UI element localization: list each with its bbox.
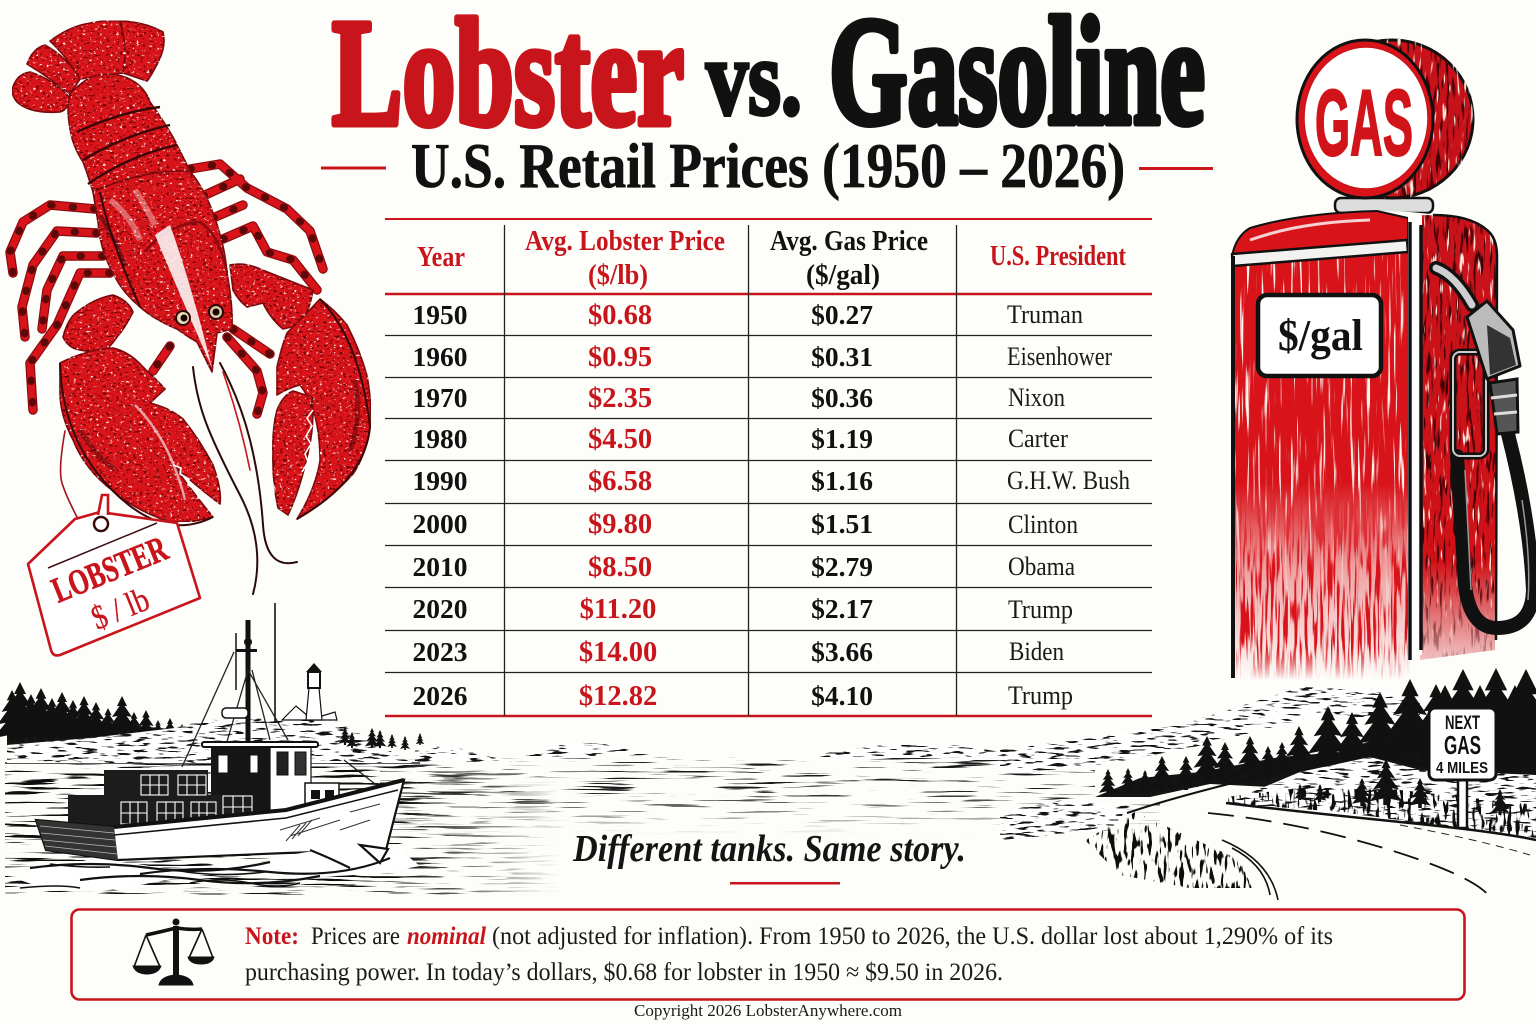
year column: 1950	[412, 299, 468, 330]
title	[332, 0, 1205, 158]
pump price window: $/gal	[1278, 311, 1363, 360]
table header row	[417, 225, 1126, 291]
year column	[412, 299, 468, 711]
lobster price column: $0.95	[588, 342, 652, 373]
year column: 2023	[412, 636, 468, 667]
table header row: ($/lb)	[588, 259, 648, 291]
gas price column: $0.36	[811, 382, 873, 413]
year column: 1960	[412, 341, 468, 372]
gas price column: $4.10	[811, 680, 873, 711]
lobster price column: $11.20	[580, 594, 656, 625]
title: vs.	[706, 19, 802, 138]
road sign: next gas 4 miles	[1429, 708, 1496, 828]
year column: 2026	[412, 680, 468, 711]
note text: (not adjusted for inflation). From 1950 to 2026, the U.S. dollar lost about 1,290% of its	[492, 923, 1333, 950]
lobster shell details	[60, 107, 370, 525]
antennae	[61, 363, 297, 594]
year column: 1990	[412, 465, 468, 496]
lighthouse	[282, 663, 337, 720]
president column: Carter	[1008, 424, 1068, 453]
year column: 2020	[412, 593, 468, 624]
price tag: lobster $/lb: LOBSTER	[46, 528, 174, 610]
subtitle with side rules: U.S. Retail Prices (1950 – 2026)	[411, 130, 1125, 201]
gas price column: $0.31	[811, 341, 873, 372]
table header row: U.S. President	[990, 240, 1126, 272]
lobster price column: $12.82	[579, 681, 657, 712]
lobster price column: $9.80	[588, 509, 652, 540]
price tag: lobster $/lb: $ / lb	[86, 581, 155, 637]
president column: G.H.W. Bush	[1007, 466, 1130, 495]
table header row: Avg. Lobster Price	[525, 225, 725, 257]
lobster body	[12, 21, 371, 522]
president column	[1007, 300, 1130, 710]
lobster eyes	[176, 305, 223, 325]
gas price column	[811, 299, 873, 711]
price tag: lobster $/lb	[28, 495, 200, 655]
president column: Clinton	[1008, 510, 1078, 539]
lobster price column	[579, 300, 657, 712]
right landscape: hills, trees and road	[1000, 668, 1536, 900]
lobster price column: $2.35	[588, 383, 652, 414]
road sign: next gas 4 miles: GAS	[1444, 730, 1481, 760]
note text: nominal	[407, 923, 486, 950]
road sign: next gas 4 miles: 4 MILES	[1436, 760, 1488, 777]
president column: Trump	[1008, 681, 1073, 710]
note text: Note:	[245, 923, 299, 950]
lobster price column: $0.68	[588, 300, 652, 331]
pump nozzle and hose	[1436, 268, 1533, 628]
gas price column: $2.79	[811, 551, 873, 582]
president column: Nixon	[1008, 383, 1065, 412]
price table	[385, 219, 1152, 716]
pump body	[1232, 211, 1497, 682]
year column: 1980	[412, 423, 468, 454]
president column: Obama	[1008, 552, 1075, 581]
lobster price column: $4.50	[588, 424, 652, 455]
gas pump illustration	[1232, 40, 1533, 682]
lobster price column: $8.50	[588, 552, 652, 583]
coastal landscape with water	[0, 682, 1160, 895]
gas price column: $0.27	[811, 299, 873, 330]
gas price column: $3.66	[811, 636, 873, 667]
tagline: Different tanks. Same story.	[572, 828, 966, 870]
walking legs	[10, 164, 323, 414]
note panel	[72, 910, 1464, 1000]
president column: Biden	[1009, 637, 1064, 666]
note text: Prices are	[311, 923, 400, 950]
gas price column: $2.17	[811, 593, 873, 624]
icon: balance scales	[133, 919, 214, 985]
gas price column: $1.16	[811, 465, 873, 496]
note text: purchasing power. In today’s dollars, $0.68 for lobster in 1950 ≈ $9.50 in 2026.	[245, 959, 1003, 986]
copyright line: Copyright 2026 LobsterAnywhere.com	[634, 1001, 902, 1020]
road sign: next gas 4 miles: NEXT	[1445, 713, 1480, 734]
lobster price column: $6.58	[588, 466, 652, 497]
lobster price column: $14.00	[579, 637, 657, 668]
note text	[245, 923, 1333, 986]
table header row: ($/gal)	[806, 259, 880, 291]
pump globe: GAS	[1315, 70, 1413, 175]
gas price column: $1.19	[811, 423, 873, 454]
pump globe	[1297, 40, 1473, 213]
lobster boat	[20, 603, 420, 891]
gas price column: $1.51	[811, 508, 873, 539]
year column: 2010	[412, 551, 468, 582]
year column: 1970	[412, 382, 468, 413]
lobster illustration	[10, 21, 371, 594]
table header row: Year	[417, 241, 465, 273]
pump price window	[1258, 295, 1381, 376]
president column: Truman	[1007, 300, 1083, 329]
table header row: Avg. Gas Price	[770, 225, 928, 257]
president column: Eisenhower	[1007, 342, 1112, 371]
president column: Trump	[1008, 595, 1073, 624]
year column: 2000	[412, 508, 468, 539]
